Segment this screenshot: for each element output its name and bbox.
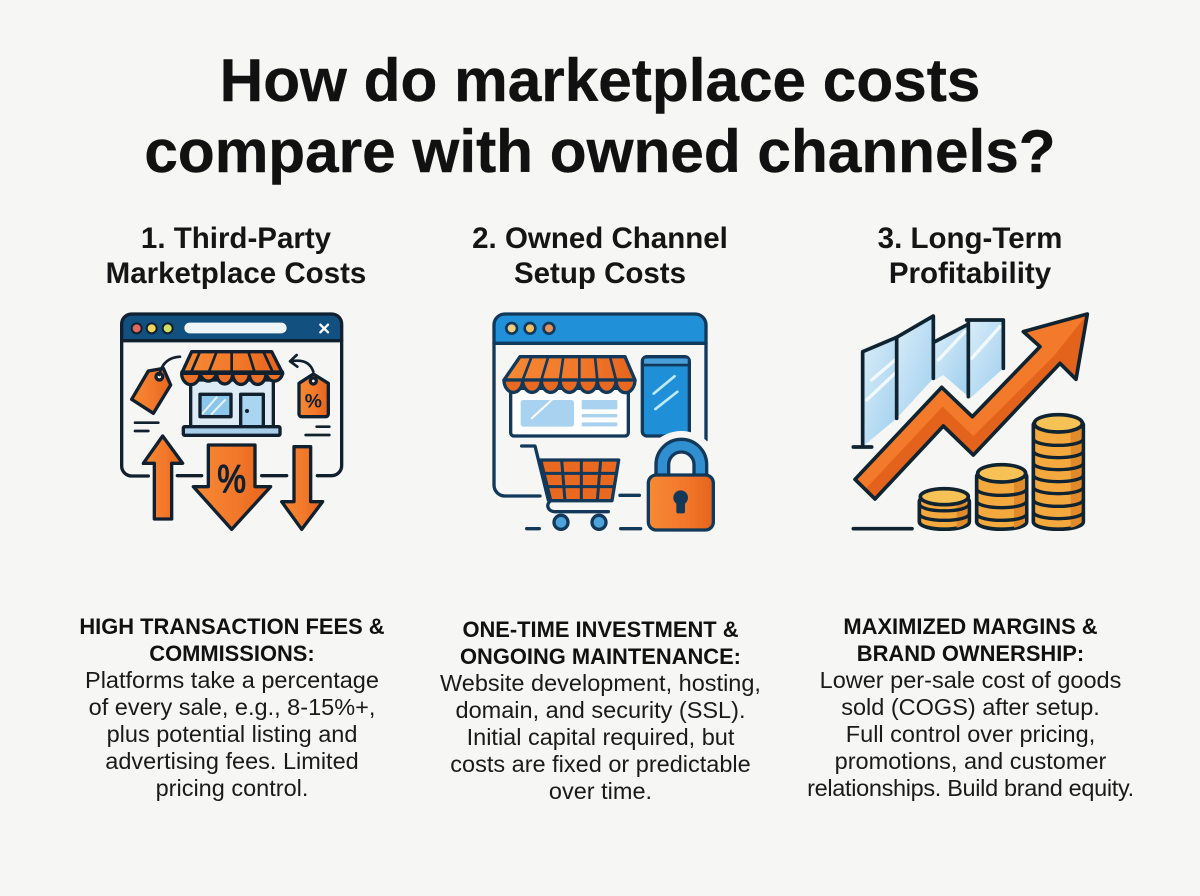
heading: owned channel setup costs: 2. Owned Channel <box>472 222 728 255</box>
heading: owned channel setup costs: Setup Costs <box>514 257 686 290</box>
text block: one-time investment: domain, and security (SSL). <box>456 697 745 723</box>
text block: one-time investment: costs are fixed or predictable <box>450 751 751 777</box>
icon: growth arrow with glass panels and coin stacks <box>851 312 1090 531</box>
text block: high transaction fees: HIGH TRANSACTION FEES & <box>79 614 385 639</box>
text block: high transaction fees: Platforms take a percentage <box>85 667 379 693</box>
text block: one-time investment: ONE-TIME INVESTMENT & <box>462 617 739 642</box>
icon: marketplace storefront with fees <box>120 312 344 532</box>
heading: long-term profitability <box>878 222 1062 290</box>
text block: high transaction fees: COMMISSIONS: <box>149 641 315 666</box>
text block: maximized margins: Full control over pricing, <box>846 721 1095 747</box>
title: compare with owned channels? <box>144 117 1056 185</box>
heading: third-party marketplace costs: 1. Third-Party <box>141 222 331 255</box>
icon: marketplace storefront with fees: % <box>217 458 246 501</box>
panel: owned channel setup costs <box>440 222 761 804</box>
text block: one-time investment: Initial capital required, but <box>467 724 734 750</box>
text block: one-time investment: ONGOING MAINTENANCE: <box>460 644 741 669</box>
heading: third-party marketplace costs <box>106 222 366 290</box>
heading: owned channel setup costs <box>472 222 728 290</box>
text block: maximized margins: sold (COGS) after setup. <box>841 694 1100 720</box>
text block: high transaction fees: advertising fees. Limited <box>105 748 359 774</box>
title: How do marketplace costs <box>220 46 980 114</box>
text block: maximized margins: promotions, and customer <box>835 748 1106 774</box>
text block: one-time investment: Website development, hosting, <box>440 670 761 696</box>
title <box>144 46 1056 185</box>
icon: marketplace storefront with fees: % <box>305 391 322 412</box>
text block: maximized margins: MAXIMIZED MARGINS & <box>843 614 1098 639</box>
text block: one-time investment: over time. <box>549 778 652 804</box>
text block: maximized margins <box>807 614 1134 801</box>
icon: online store with cart and padlock <box>492 312 715 532</box>
text block: one-time investment <box>440 617 761 804</box>
text block: maximized margins: Lower per-sale cost of goods <box>820 667 1121 693</box>
text block: maximized margins: BRAND OWNERSHIP: <box>857 641 1084 666</box>
panel: third-party marketplace costs <box>79 222 385 801</box>
text block: high transaction fees: of every sale, e.g., 8-15%+, <box>89 694 375 720</box>
text block: maximized margins: relationships. Build brand equity. <box>807 775 1134 801</box>
heading: long-term profitability: 3. Long-Term <box>878 222 1062 255</box>
panel: long-term profitability <box>807 222 1134 801</box>
text block: high transaction fees: pricing control. <box>156 775 308 801</box>
heading: long-term profitability: Profitability <box>889 257 1051 290</box>
heading: third-party marketplace costs: Marketplace Costs <box>106 257 366 290</box>
text block: high transaction fees <box>79 614 385 801</box>
text block: high transaction fees: plus potential listing and <box>107 721 357 747</box>
